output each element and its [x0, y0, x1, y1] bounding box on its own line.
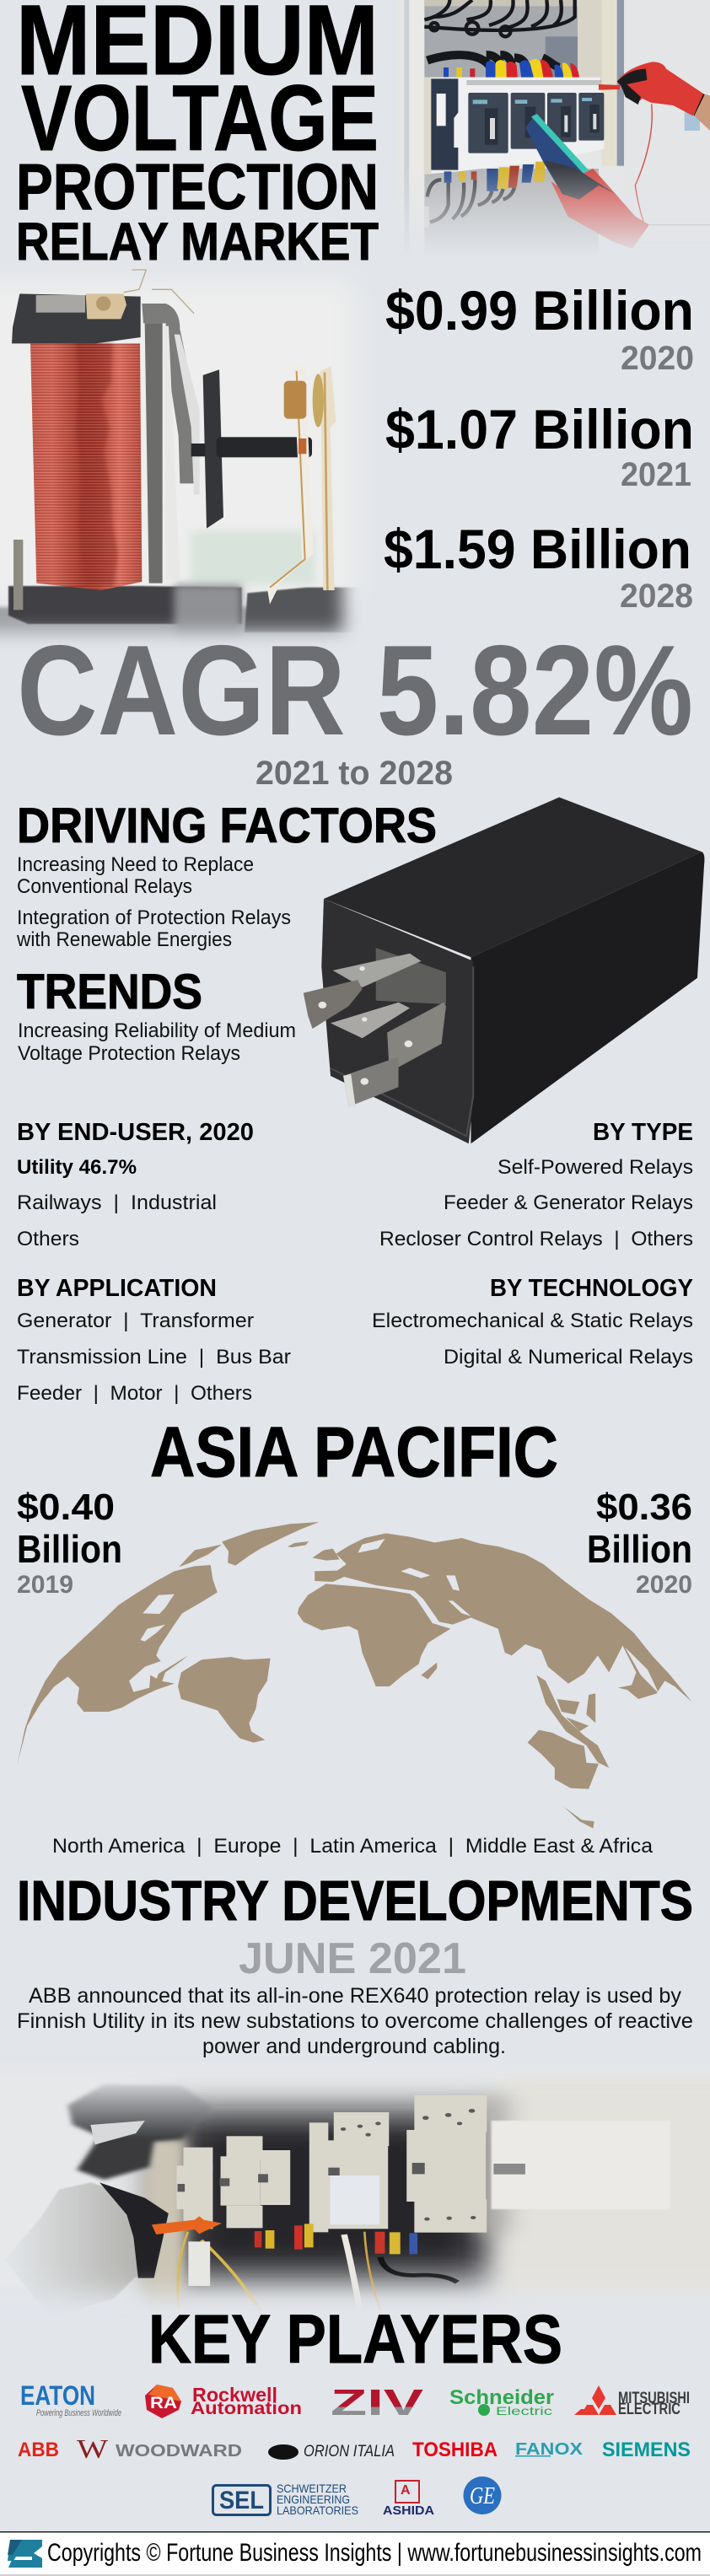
world map — [17, 1522, 692, 1828]
logo: Schweitzer Engineering Laboratories — [212, 2482, 358, 2517]
regional value 2019: Billion — [17, 1527, 122, 1571]
logo: General Electric — [464, 2477, 501, 2514]
segment: by technology — [372, 1275, 693, 1369]
spring contacts — [267, 364, 314, 605]
industry developments — [17, 1869, 693, 2058]
logo: Schneider Electric: Electric — [496, 2404, 552, 2417]
industry developments: Finnish Utility in its new substations to overcome challenges of reactive — [17, 2009, 693, 2033]
segment: by application: Generator | Transformer — [17, 1310, 254, 1332]
central america and caribbean — [154, 1655, 188, 1686]
driving factors: Increasing Need to Replace — [17, 853, 254, 876]
segment: by type — [379, 1119, 693, 1250]
segment: by end-user: Others — [17, 1228, 79, 1250]
top frame — [12, 293, 141, 343]
segment: by end-user: Railways | Industrial — [17, 1191, 217, 1214]
contactor modules — [176, 2095, 487, 2233]
trends: TRENDS — [17, 965, 202, 1019]
southeast asia islands — [536, 1675, 609, 1768]
title: PROTECTION — [16, 151, 379, 223]
south america — [178, 1657, 271, 1743]
logo: Eaton: EATON — [20, 2380, 95, 2411]
photo: technician testing breakers in electrical panel — [404, 0, 710, 249]
australia — [528, 1730, 599, 1789]
logo: Rockwell Automation: Automation — [191, 2399, 302, 2418]
industry developments: power and underground cabling. — [202, 2035, 506, 2058]
orange probe — [152, 2216, 222, 2235]
metal terminals — [333, 954, 421, 987]
logo: Schneider Electric: Schneider — [449, 2386, 554, 2409]
market value stats: 2020 — [621, 340, 694, 377]
market value stats: 2028 — [620, 578, 693, 615]
hudson bay and great lakes gaps — [140, 1595, 175, 1642]
logo: Rockwell Automation: Rockwell — [192, 2384, 277, 2406]
driving factors: Conventional Relays — [17, 875, 192, 898]
industry developments: ABB announced that its all-in-one REX640 protection relay is used by — [29, 1984, 681, 2008]
regional value 2020: Billion — [587, 1527, 692, 1571]
logo: General Electric: GE — [470, 2483, 495, 2509]
logo: Schweitzer Engineering Laboratories: ENGINEERING — [277, 2493, 350, 2506]
logo: Woodward: WOODWARD — [116, 2442, 242, 2460]
logo: Mitsubishi Electric — [574, 2385, 690, 2418]
logo: ABB: ABB — [18, 2439, 59, 2461]
logo: Schweitzer Engineering Laboratories: LABORATORIES — [277, 2503, 358, 2517]
market value stats: $1.59 Billion — [384, 518, 691, 580]
lower gloved hand — [551, 169, 649, 249]
logo: Woodward: W — [77, 2433, 109, 2464]
madagascar — [421, 1663, 437, 1680]
logo: Mitsubishi Electric: ELECTRIC — [618, 2401, 680, 2418]
photo: contactors on a panel with a test probe — [24, 2079, 710, 2310]
trends — [17, 965, 296, 1065]
regional value 2019 — [17, 1487, 122, 1599]
segment: by type: BY TYPE — [593, 1119, 693, 1146]
segment: by application: Transmission Line | Bus Bar — [17, 1346, 291, 1369]
regional value 2019: 2019 — [17, 1571, 73, 1599]
wires — [176, 2224, 460, 2310]
breaker block — [424, 78, 605, 175]
africa — [298, 1584, 450, 1686]
regional heading: ASIA PACIFIC — [150, 1412, 558, 1492]
logo: Schneider Electric — [449, 2386, 554, 2417]
segment: by technology: Electromechanical & Static Relays — [372, 1310, 693, 1332]
coil — [30, 343, 142, 590]
logo: Orion Italia — [268, 2443, 395, 2460]
company logos — [18, 2380, 691, 2518]
new zealand — [564, 1807, 594, 1828]
trends: Increasing Reliability of Medium — [18, 1019, 296, 1042]
regional value 2020: $0.36 — [596, 1487, 692, 1528]
photo: open electromagnetic relay with copper coil — [0, 260, 356, 643]
segment: by application: Feeder | Motor | Others — [17, 1382, 252, 1405]
segment: by type: Feeder & Generator Relays — [444, 1191, 693, 1214]
inland seas — [358, 1539, 659, 1693]
segment: by application — [17, 1275, 291, 1405]
segment: by end-user — [17, 1119, 254, 1250]
logo: Fanox: FANOX — [515, 2440, 584, 2459]
market value stats: 2021 — [621, 456, 691, 493]
base — [0, 579, 356, 643]
regional value 2019: $0.40 — [17, 1487, 115, 1528]
coloured wires — [428, 55, 559, 67]
logo: Rockwell Automation: RA — [150, 2395, 177, 2412]
other regions list: North America | Europe | Latin America | Middle East & Africa — [52, 1835, 654, 1858]
north america — [17, 1565, 218, 1765]
regional value 2020: 2020 — [636, 1571, 692, 1599]
driving factors: Integration of Protection Relays — [17, 906, 291, 929]
lower wire stubs — [444, 162, 546, 191]
title — [16, 0, 379, 272]
driving factors: DRIVING FACTORS — [17, 799, 437, 853]
regional value 2020 — [587, 1487, 692, 1599]
upper black wires — [424, 0, 575, 36]
segment: by type: Recloser Control Relays | Others — [379, 1228, 693, 1250]
logo: Schweitzer Engineering Laboratories: SCHWEITZER — [277, 2482, 347, 2495]
icon: Fortune Business Insights mark — [8, 2540, 42, 2568]
segment: by application: BY APPLICATION — [17, 1275, 217, 1302]
CAGR: 2021 to 2028 — [255, 755, 453, 792]
logo: Eaton: Powering Business Worldwide — [36, 2408, 121, 2418]
segment: by type: Self-Powered Relays — [498, 1156, 693, 1179]
bracket plate and rod — [203, 369, 223, 529]
logo: Mitsubishi Electric: MITSUBISHI — [618, 2390, 690, 2407]
blanked label — [330, 2175, 379, 2224]
market value stats — [384, 279, 694, 615]
logo: ZIV: ZIV — [331, 2382, 424, 2423]
logo: Woodward — [77, 2433, 242, 2464]
solder tag — [13, 540, 23, 610]
multimeter — [525, 114, 584, 187]
logo: Toshiba: TOSHIBA — [412, 2439, 498, 2461]
photo: black automotive relay — [304, 798, 704, 1143]
segment: by technology: Digital & Numerical Relays — [444, 1346, 693, 1369]
eurasia — [315, 1533, 692, 1702]
title: RELAY MARKET — [16, 212, 379, 272]
market value stats: $1.07 Billion — [385, 398, 694, 460]
industry developments: JUNE 2021 — [239, 1934, 466, 1983]
footer — [0, 2531, 710, 2576]
title: VOLTAGE — [21, 67, 379, 170]
red gloved hand, upper — [599, 84, 620, 90]
segment: by end-user: Utility 46.7% — [17, 1156, 137, 1179]
logo: Ashida: ASHIDA — [383, 2503, 434, 2518]
logo: Orion Italia: ORION ITALIA — [304, 2443, 395, 2460]
driving factors: with Renewable Energies — [16, 928, 232, 951]
greenland and iceland — [222, 1522, 320, 1566]
market value stats: $0.99 Billion — [385, 279, 694, 341]
segment: by end-user: BY END-USER, 2020 — [17, 1119, 254, 1146]
trends: Voltage Protection Relays — [18, 1042, 240, 1065]
key players heading: KEY PLAYERS — [148, 2301, 562, 2378]
logo: Ashida: A — [401, 2483, 411, 2498]
united kingdom — [313, 1549, 340, 1561]
logo: Siemens: SIEMENS — [602, 2439, 691, 2461]
logo: Rockwell Automation — [145, 2384, 302, 2418]
logo: Schweitzer Engineering Laboratories: SEL — [219, 2487, 264, 2514]
arctic islands — [179, 1545, 222, 1567]
logo: Ashida — [383, 2481, 434, 2518]
segment: by technology: BY TECHNOLOGY — [490, 1275, 693, 1302]
driving factors — [16, 799, 437, 951]
